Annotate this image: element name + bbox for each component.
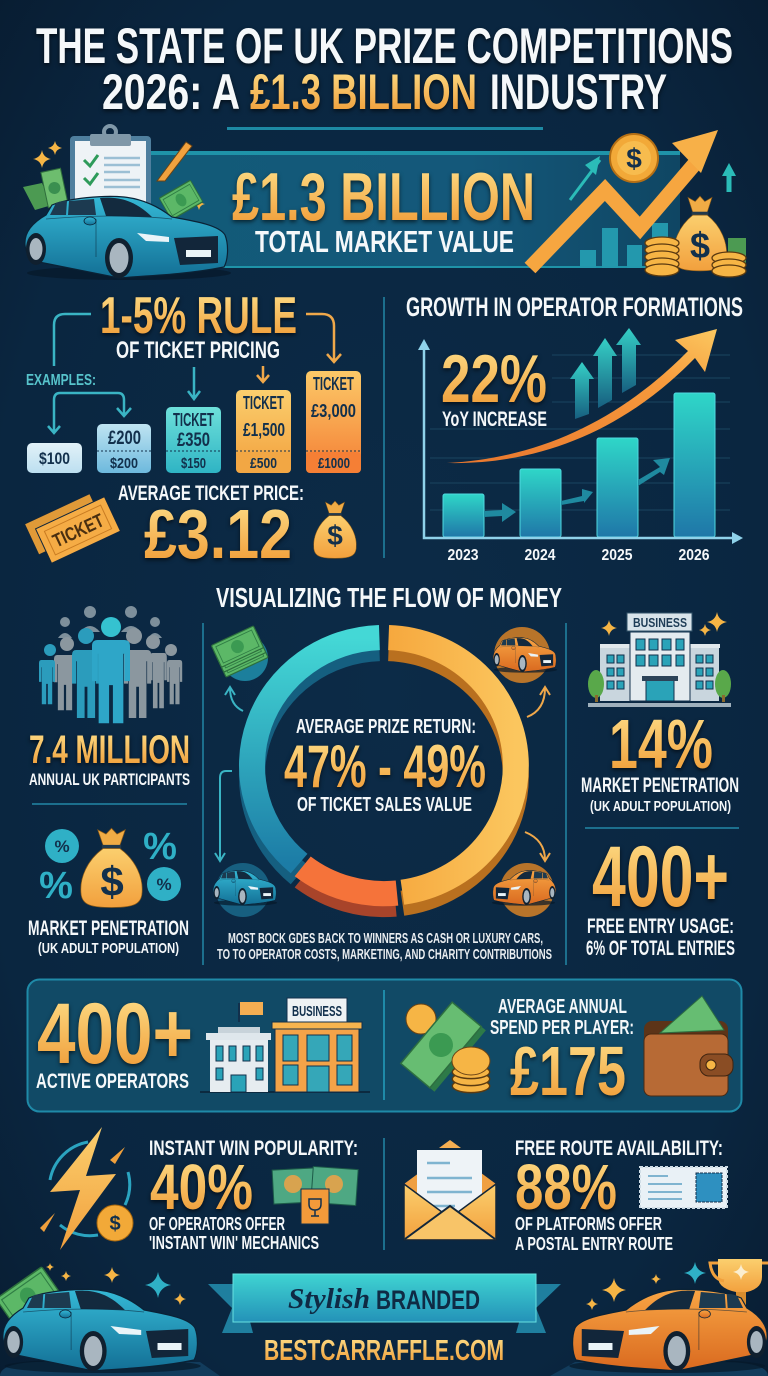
label: average annual: AVERAGE ANNUAL bbox=[498, 996, 627, 1018]
ticket: 100: $100 bbox=[39, 449, 70, 468]
ticket: 3000: TICKET bbox=[313, 374, 354, 394]
chart: operator growth bars bbox=[418, 339, 743, 544]
ticket: 3000 bbox=[306, 371, 361, 473]
arrow: examples to small tickets bbox=[48, 393, 131, 433]
ticket: 200: £200 bbox=[108, 428, 141, 449]
panel: market penetration left bbox=[28, 826, 189, 957]
ticket: 350: TICKET bbox=[173, 410, 214, 430]
text: website: BESTCARRAFFLE.COM bbox=[264, 1335, 504, 1367]
label: of operators offer: OF OPERATORS OFFER bbox=[149, 1214, 285, 1234]
icon: envelope with letter bbox=[404, 1140, 496, 1240]
icon: footer blue car bbox=[3, 1289, 201, 1373]
label: average ticket price: AVERAGE TICKET PRICE: bbox=[118, 482, 304, 505]
label: postal entry route: A POSTAL ENTRY ROUTE bbox=[515, 1234, 673, 1254]
label: uk adult population: (UK ADULT POPULATION) bbox=[38, 940, 179, 957]
stat: 175: £175 bbox=[510, 1032, 626, 1110]
label: market penetration: MARKET PENETRATION bbox=[28, 917, 189, 940]
subheading: of ticket pricing: OF TICKET PRICING bbox=[116, 337, 280, 364]
icon: tickets bbox=[24, 489, 120, 567]
axis labels: 2023 bbox=[448, 547, 479, 564]
axis labels: 2024 bbox=[524, 547, 556, 564]
ticket: 350: $150 bbox=[181, 455, 206, 472]
icon: money bag with percents: $ bbox=[100, 858, 124, 905]
ticket: 200: $200 bbox=[110, 455, 138, 472]
panel: instant win bbox=[40, 1127, 358, 1253]
ticket: 1500: £1,500 bbox=[243, 420, 285, 440]
text: flow of money caption bbox=[217, 930, 552, 963]
ticket: 1500: TICKET bbox=[243, 393, 284, 413]
panel: free entry usage bbox=[586, 829, 735, 960]
icon: blue car circle bbox=[213, 863, 277, 917]
axis labels bbox=[448, 547, 710, 564]
stat: 22%: 22% bbox=[441, 341, 547, 417]
panel: growth in operator formations bbox=[406, 292, 743, 564]
stat: 3.12: £3.12 bbox=[144, 495, 292, 573]
icon: orange car circle top bbox=[493, 627, 557, 683]
ticket: 100 bbox=[27, 443, 82, 473]
label: active operators: ACTIVE OPERATORS bbox=[36, 1070, 189, 1093]
icon: money bag with percents bbox=[39, 826, 181, 908]
panel: participants bbox=[29, 606, 190, 789]
icon: cash and trophy card bbox=[272, 1167, 358, 1224]
icon: orange car circle bottom bbox=[492, 863, 556, 917]
label: instant win mechanics: 'INSTANT WIN' MECHANICS bbox=[149, 1233, 319, 1253]
icon: up arrows bbox=[570, 328, 641, 419]
icon: postcard stamp bbox=[640, 1167, 727, 1208]
ticket: 350: £350 bbox=[177, 430, 210, 451]
icon: tickets: TICKET bbox=[50, 510, 108, 552]
panel: operators and spend bbox=[28, 980, 742, 1112]
icon: money bag with percents: % bbox=[54, 837, 70, 856]
arrow: teal from rule to examples bbox=[54, 314, 91, 366]
label: spend per player: SPEND PER PLAYER: bbox=[490, 1017, 634, 1039]
ticket: 200 bbox=[97, 424, 151, 473]
ribbon: stylish branded bbox=[208, 1274, 561, 1333]
icon: rising arrow with coin and money bag bbox=[530, 130, 746, 277]
icon: money bag bbox=[314, 501, 356, 558]
text: flow of money caption: TO TO OPERATOR COSTS, MARKETING, AND CHARITY CONTRIBUTIONS bbox=[217, 946, 552, 963]
icon: lightning and coin: $ bbox=[109, 1213, 121, 1235]
icon: business building bbox=[588, 612, 731, 707]
ribbon: stylish branded: Stylish bbox=[288, 1284, 370, 1315]
label: of platforms offer: OF PLATFORMS OFFER bbox=[515, 1214, 662, 1234]
icon: cash and coins bbox=[401, 1002, 490, 1093]
arrow: growth curve bbox=[447, 329, 717, 463]
icon: money bag with percents: % bbox=[156, 875, 172, 894]
icon: money bag: $ bbox=[327, 520, 343, 551]
ribbon: stylish branded: BRANDED bbox=[376, 1285, 480, 1315]
icon: footer orange car bbox=[569, 1289, 767, 1373]
icon: business building: BUSINESS bbox=[633, 615, 687, 630]
heading: 1-5% rule: 1-5% RULE bbox=[100, 287, 297, 345]
text: average prize return: AVERAGE PRIZE RETURN: bbox=[296, 716, 476, 738]
axis labels: 2025 bbox=[602, 547, 633, 564]
stat: 7.4 million: 7.4 MILLION bbox=[29, 728, 190, 772]
icon: trophy bbox=[710, 1259, 768, 1312]
icon: cash circle bbox=[211, 626, 268, 681]
ticket: 1500: £500 bbox=[250, 455, 277, 472]
footer decorations bbox=[0, 1262, 768, 1376]
icon: wallet bbox=[644, 996, 733, 1096]
ticket: 350 bbox=[166, 407, 221, 473]
stat: 88%: 88% bbox=[515, 1151, 617, 1223]
stat: 1.3 billion: £1.3 BILLION bbox=[232, 159, 535, 235]
icon: operator buildings: BUSINESS bbox=[292, 1003, 342, 1020]
panel: free route bbox=[404, 1137, 727, 1254]
stat: 14%: 14% bbox=[609, 705, 713, 783]
icon: clipboard with checklist and pencil bbox=[23, 126, 205, 220]
icon: money bag with percents: % bbox=[143, 826, 177, 868]
label: instant win popularity: INSTANT WIN POPULARITY: bbox=[149, 1137, 358, 1160]
icon: lightning and coin bbox=[40, 1127, 133, 1250]
chart: prize return donut bbox=[252, 638, 516, 905]
stat: 40%: 40% bbox=[150, 1151, 253, 1223]
axis labels: 2026 bbox=[678, 547, 710, 564]
label: examples: EXAMPLES: bbox=[26, 372, 96, 389]
icon: operator buildings bbox=[200, 998, 370, 1093]
icon: money bag with percents: % bbox=[39, 865, 73, 907]
title: 2026: A bbox=[102, 64, 240, 120]
ticket: 3000: £3,000 bbox=[311, 401, 356, 421]
arrow: down to 350 ticket bbox=[188, 367, 200, 399]
arrow: orange from rule to top ticket bbox=[306, 314, 341, 362]
icon: rising arrow with coin and money bag: $ bbox=[690, 225, 710, 266]
panel: market value banner bbox=[150, 151, 680, 268]
icon: blue car bbox=[25, 196, 231, 280]
ticket: 1500 bbox=[236, 390, 291, 473]
heading: visualizing the flow of money: VISUALIZING THE FLOW OF MONEY bbox=[216, 582, 562, 613]
text: flow of money caption: MOST BOCK GDES BACK TO WINNERS AS CASH OR LUXURY CARS, bbox=[228, 930, 543, 947]
panel: 1-5% rule bbox=[24, 287, 361, 573]
stat: 400+ active operators: 400+ bbox=[37, 986, 193, 1082]
text: of ticket sales value: OF TICKET SALES VALUE bbox=[297, 794, 472, 816]
label: total market value: TOTAL MARKET VALUE bbox=[255, 224, 514, 259]
icon: rising arrow with coin and money bag: $ bbox=[626, 143, 642, 174]
label: annual uk participants: ANNUAL UK PARTICIPANTS bbox=[29, 770, 190, 789]
arrows: around donut bbox=[215, 687, 550, 861]
label: yoy increase: YoY INCREASE bbox=[442, 408, 547, 431]
title: INDUSTRY bbox=[490, 64, 667, 120]
title bbox=[36, 18, 733, 120]
stat: 47-49 percent: 47% - 49% bbox=[284, 733, 486, 800]
ticket: 3000: £1000 bbox=[318, 455, 350, 472]
icon: crowd bbox=[39, 606, 182, 723]
title: £1.3 BILLION bbox=[250, 64, 477, 120]
arrow: down to 1500 ticket bbox=[257, 366, 269, 382]
panel: market penetration right bbox=[581, 612, 739, 815]
